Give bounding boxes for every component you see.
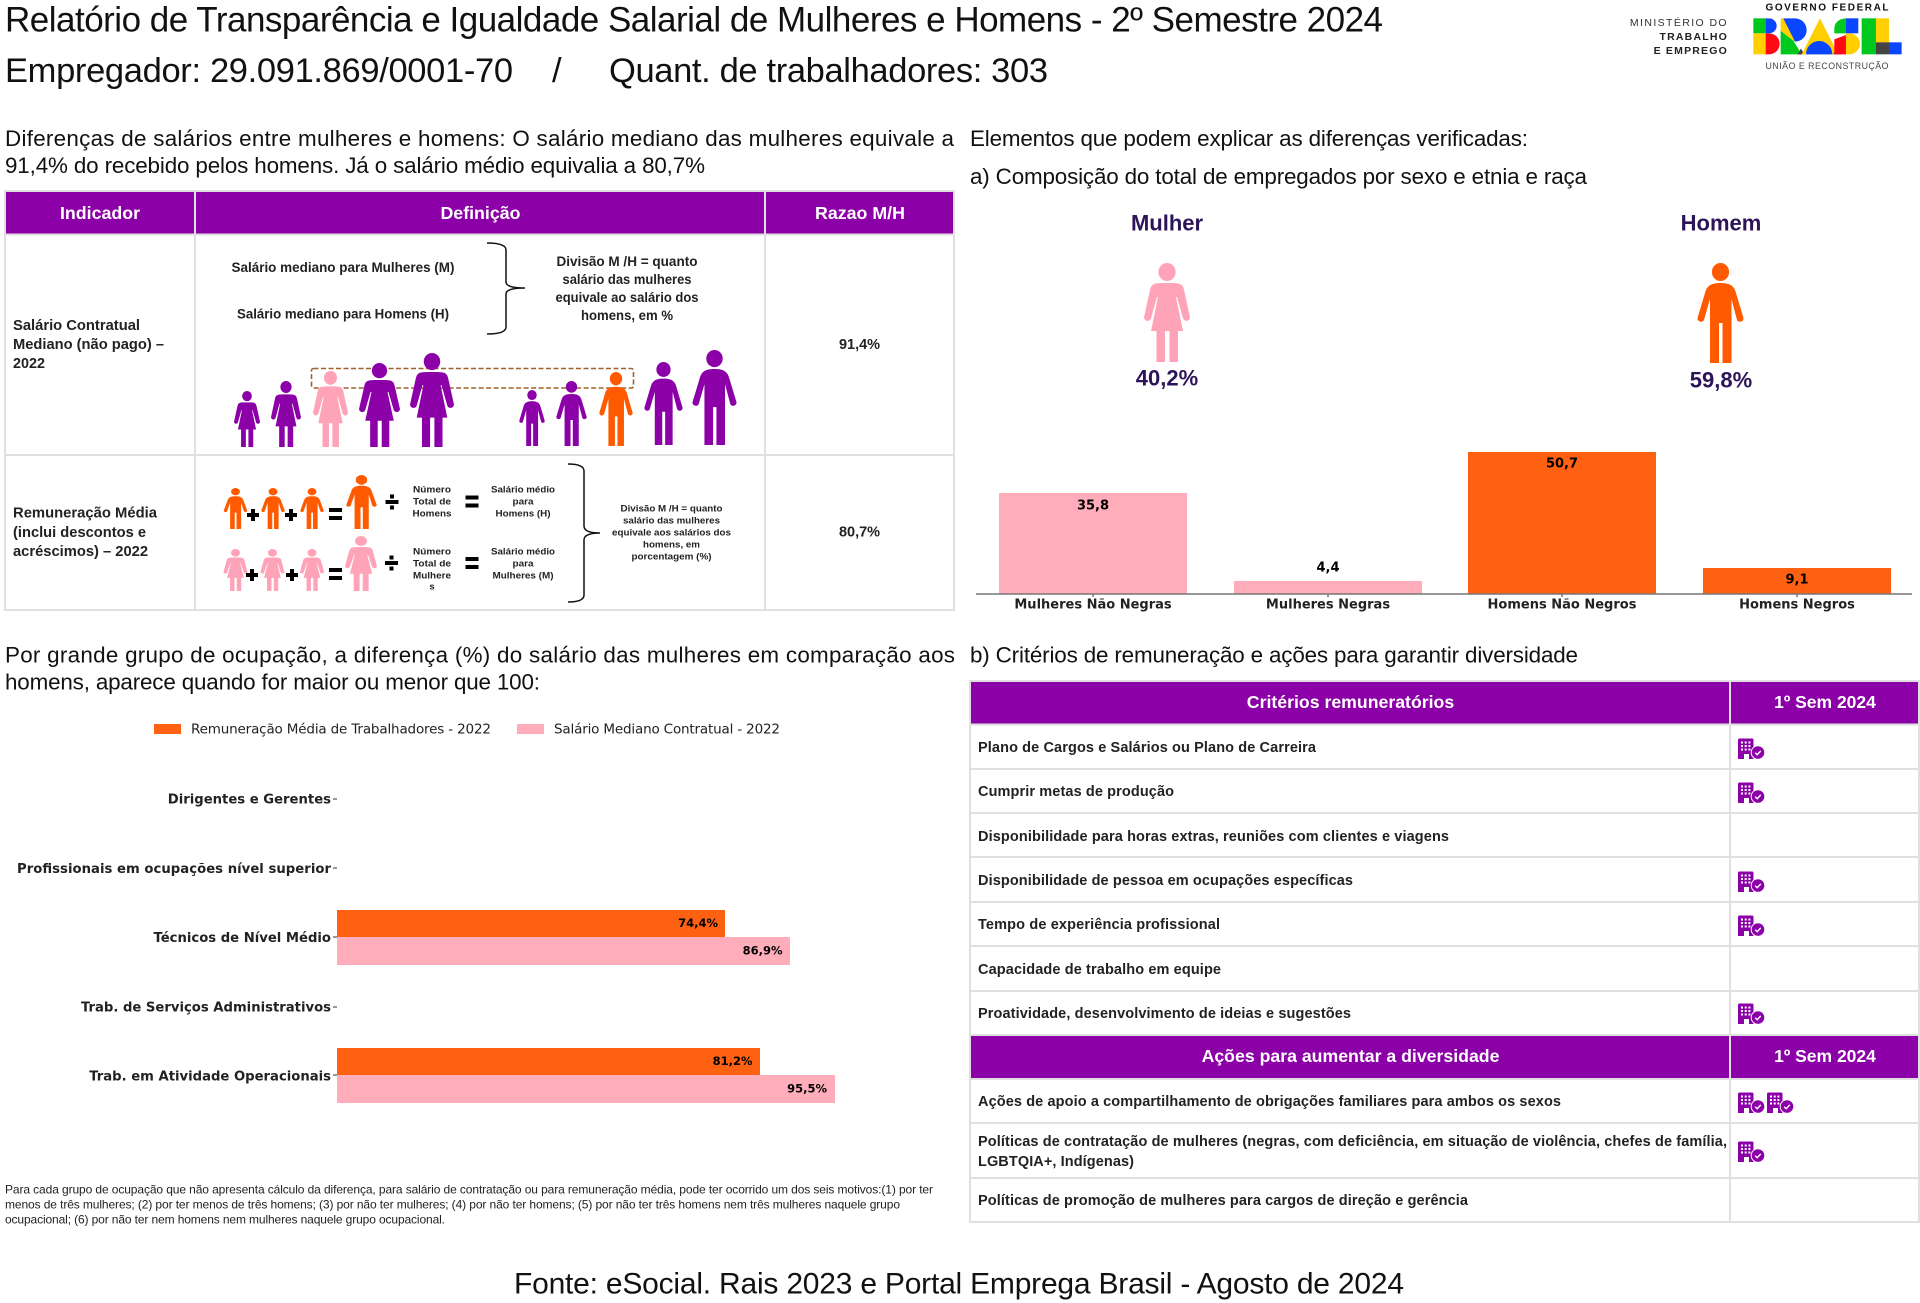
action rows: Ações de apoio a compartilhamento de obrigações familiares para ambos os sexos [978, 1094, 1561, 1110]
definition: median formula text [232, 259, 454, 322]
definition: average division explanation [612, 504, 731, 562]
woman share: Mulher [1131, 210, 1203, 236]
bar chart: occupation groups: Profissionais em ocupações nível superior [17, 861, 331, 877]
bar chart: sex and race composition: 50,7 [1546, 456, 1578, 472]
bar chart: occupation groups: Dirigentes e Gerentes [168, 792, 331, 808]
bar chart: occupation groups: Trab. em Atividade Operacionais [89, 1070, 331, 1084]
action rows: LGBTQIA+, Indígenas) [978, 1154, 1134, 1170]
ratio value: average: 80,7% [839, 524, 880, 540]
definition: median formula text: Salário mediano para Mulheres (M) [232, 259, 454, 275]
intro text: occupation groups [5, 642, 955, 694]
icons: women average formula: Mulheres (M) [492, 570, 554, 582]
logo: ministério do trabalho e emprego: TRABALHO [1659, 31, 1728, 43]
man share: Homem [1681, 210, 1761, 236]
table header [5, 192, 955, 234]
source footer: Fonte: eSocial. Rais 2023 e Portal Emprega Brasil - Agosto de 2024 [514, 1268, 1404, 1300]
intro text: occupation groups: Por grande grupo de ocupação, a diferença (%) do salário das mulheres em comparação aos [5, 642, 955, 668]
definition: M/H division explanation: salário das mulheres [562, 271, 692, 287]
employer information: Quant. de trabalhadores: 303 [609, 52, 1048, 90]
icons: men average formula: Número [413, 484, 451, 496]
brace [487, 243, 525, 334]
intro text: wage differences: 91,4% do recebido pelos homens. Já o salário médio equivalia a 80,7% [5, 153, 705, 178]
row label: salário contratual mediano [13, 318, 164, 372]
man share: 59,8% [1690, 368, 1752, 392]
action rows [978, 1094, 1727, 1209]
intro text: wage differences [5, 126, 955, 178]
actions table header: 1º Sem 2024 [1774, 1046, 1876, 1066]
man share [1681, 210, 1761, 392]
bar chart: occupation groups: 74,4% [678, 916, 718, 930]
criteria rows: Disponibilidade para horas extras, reuniões com clientes e viagens [978, 829, 1449, 845]
intro text: wage differences: Diferenças de salários entre mulheres e homens: O salário mediano das mulheres equivale a [5, 126, 955, 151]
table header: Razao M/H [815, 203, 905, 223]
criteria table header: 1º Sem 2024 [1774, 692, 1876, 712]
panel: criteria and actions table [969, 681, 1920, 1222]
bar chart: sex and race composition [976, 452, 1912, 612]
median highlight box [312, 368, 634, 388]
chart legend [154, 722, 780, 738]
definition: M/H division explanation: homens, em % [581, 307, 674, 323]
bar chart: occupation groups [17, 792, 835, 1103]
icons: women average formula: Número [413, 546, 451, 558]
bar chart: occupation groups: 86,9% [743, 944, 783, 958]
icons: men average formula: Homens [412, 508, 452, 520]
woman share: 40,2% [1136, 366, 1198, 390]
criteria table header: Critérios remuneratórios [1247, 692, 1454, 712]
definition: M/H division explanation [556, 253, 699, 323]
criteria rows: Cumprir metas de produção [978, 784, 1174, 800]
row label: remuneração média: Remuneração Média [13, 506, 158, 522]
bar chart: sex and race composition: Homens Negros [1739, 598, 1855, 612]
heading: remuneration criteria: b) Critérios de remuneração e ações para garantir diversidade [970, 642, 1578, 668]
icons: women average formula [224, 536, 555, 592]
panel: indicator table [4, 191, 955, 610]
footnote: Para cada grupo de ocupação que não apresenta cálculo da diferença, para salário de contratação ou para remuneração média, pode ter ocorrido um dos seis motivos:(1) por ter [5, 1182, 933, 1196]
footnote [5, 1182, 933, 1226]
icons: men line-up [519, 350, 737, 446]
row label: remuneração média [13, 506, 158, 560]
criteria table header [970, 682, 1920, 724]
criteria rows: Tempo de experiência profissional [978, 917, 1220, 933]
icons: men average formula [224, 475, 555, 529]
definition: median formula text: Salário mediano para Homens (H) [237, 306, 449, 322]
row label: salário contratual mediano: Mediano (não pago) – [13, 337, 164, 353]
row label: salário contratual mediano: 2022 [13, 356, 45, 372]
chart legend: Salário Mediano Contratual - 2022 [554, 722, 780, 738]
row label: remuneração média: acréscimos) – 2022 [13, 544, 148, 560]
bar chart: sex and race composition: Homens Não Negros [1488, 598, 1637, 612]
definition: average division explanation: Divisão M /H = quanto [620, 504, 723, 514]
title: Relatório de Transparência e Igualdade Salarial de Mulheres e Homens - 2º Semestre 2024 [5, 0, 1383, 40]
bar chart: sex and race composition: 9,1 [1785, 572, 1809, 588]
row label: salário contratual mediano: Salário Contratual [13, 318, 140, 334]
definition: average division explanation: homens, em [643, 540, 700, 550]
definition: average division explanation: salário das mulheres [623, 516, 720, 526]
action rows: Políticas de promoção de mulheres para cargos de direção e gerência [978, 1193, 1469, 1209]
icons: women average formula: Mulhere [413, 570, 451, 582]
icons: women average formula: Total de [413, 558, 451, 570]
employer information: Empregador: 29.091.869/0001-70 [5, 52, 513, 90]
logo: ministério do trabalho e emprego: E EMPREGO [1654, 45, 1728, 57]
bar chart: sex and race composition: 35,8 [1077, 498, 1109, 514]
logo: governo federal brasil: GOVERNO FEDERAL [1766, 2, 1888, 14]
logo: ministério do trabalho e emprego [1630, 16, 1728, 57]
employer information: / [552, 52, 562, 90]
criteria rows [978, 740, 1449, 1022]
woman share [1131, 210, 1203, 390]
criteria rows: Disponibilidade de pessoa em ocupações específicas [978, 873, 1353, 889]
bar chart: sex and race composition: 4,4 [1316, 560, 1340, 576]
chart legend: Remuneração Média de Trabalhadores - 2022 [191, 722, 491, 738]
icons: men average formula: Salário médio [491, 484, 555, 496]
action rows: Políticas de contratação de mulheres (negras, com deficiência, em situação de violência, chefes de família, [978, 1134, 1727, 1150]
actions table header: Ações para aumentar a diversidade [1202, 1046, 1500, 1066]
bar chart: occupation groups: 95,5% [787, 1082, 827, 1096]
employer information [5, 52, 1048, 90]
criteria rows: Plano de Cargos e Salários ou Plano de Carreira [978, 740, 1317, 756]
intro text: occupation groups: homens, aparece quando for maior ou menor que 100: [5, 670, 540, 694]
logo: ministério do trabalho e emprego: MINISTÉRIO DO [1630, 16, 1728, 29]
criteria rows: Capacidade de trabalho em equipe [978, 962, 1221, 978]
definition: average division explanation: equivale aos salários dos [612, 528, 731, 538]
icons: women line-up [234, 353, 454, 447]
table header: Definição [440, 203, 521, 223]
action icons: building check [1738, 1092, 1794, 1162]
heading: composition of employees: a) Composição do total de empregados por sexo e etnia e raça [970, 164, 1588, 189]
actions table header [970, 1035, 1920, 1079]
icons: women average formula: Salário médio [491, 546, 555, 558]
icons: men average formula: Total de [413, 496, 451, 508]
definition: M/H division explanation: equivale ao salário dos [556, 289, 699, 305]
footnote: menos de três mulheres; (2) por ter menos de três homens; (3) por não ter mulheres; (4) por não ter homens; (5) por não ter três homens nem três mulheres naquele grupo [5, 1198, 900, 1212]
criteria icons: building check [1738, 738, 1765, 1024]
icons: women average formula: s [429, 582, 435, 592]
bar chart: occupation groups: 81,2% [713, 1054, 753, 1068]
bar chart: occupation groups: Técnicos de Nível Médio [153, 930, 331, 946]
logo: governo federal brasil: UNIÃO E RECONSTRUÇÃO [1766, 61, 1889, 71]
footnote: ocupacional; (6) por não ter nem homens nem mulheres naquele grupo ocupacional. [5, 1212, 445, 1226]
icons: women average formula: para [512, 558, 534, 570]
bar chart: sex and race composition: Mulheres Não Negras [1014, 598, 1172, 612]
logo: governo federal brasil [1753, 2, 1902, 71]
definition: M/H division explanation: Divisão M /H = quanto [556, 253, 698, 269]
brace [568, 464, 600, 602]
table header: Indicador [60, 203, 140, 223]
icons: men average formula: Homens (H) [496, 508, 550, 520]
icons: men average formula: para [512, 496, 534, 508]
definition: average division explanation: porcentagem (%) [632, 552, 712, 562]
ratio value: median: 91,4% [839, 337, 880, 353]
bar chart: occupation groups: Trab. de Serviços Administrativos [81, 1000, 331, 1016]
heading: explanatory elements: Elementos que podem explicar as diferenças verificadas: [970, 126, 1528, 151]
bar chart: sex and race composition: Mulheres Negras [1266, 598, 1390, 612]
row label: remuneração média: (inclui descontos e [13, 525, 146, 541]
panel: sex composition [1131, 210, 1761, 392]
criteria rows: Proatividade, desenvolvimento de ideias e sugestões [978, 1006, 1351, 1022]
